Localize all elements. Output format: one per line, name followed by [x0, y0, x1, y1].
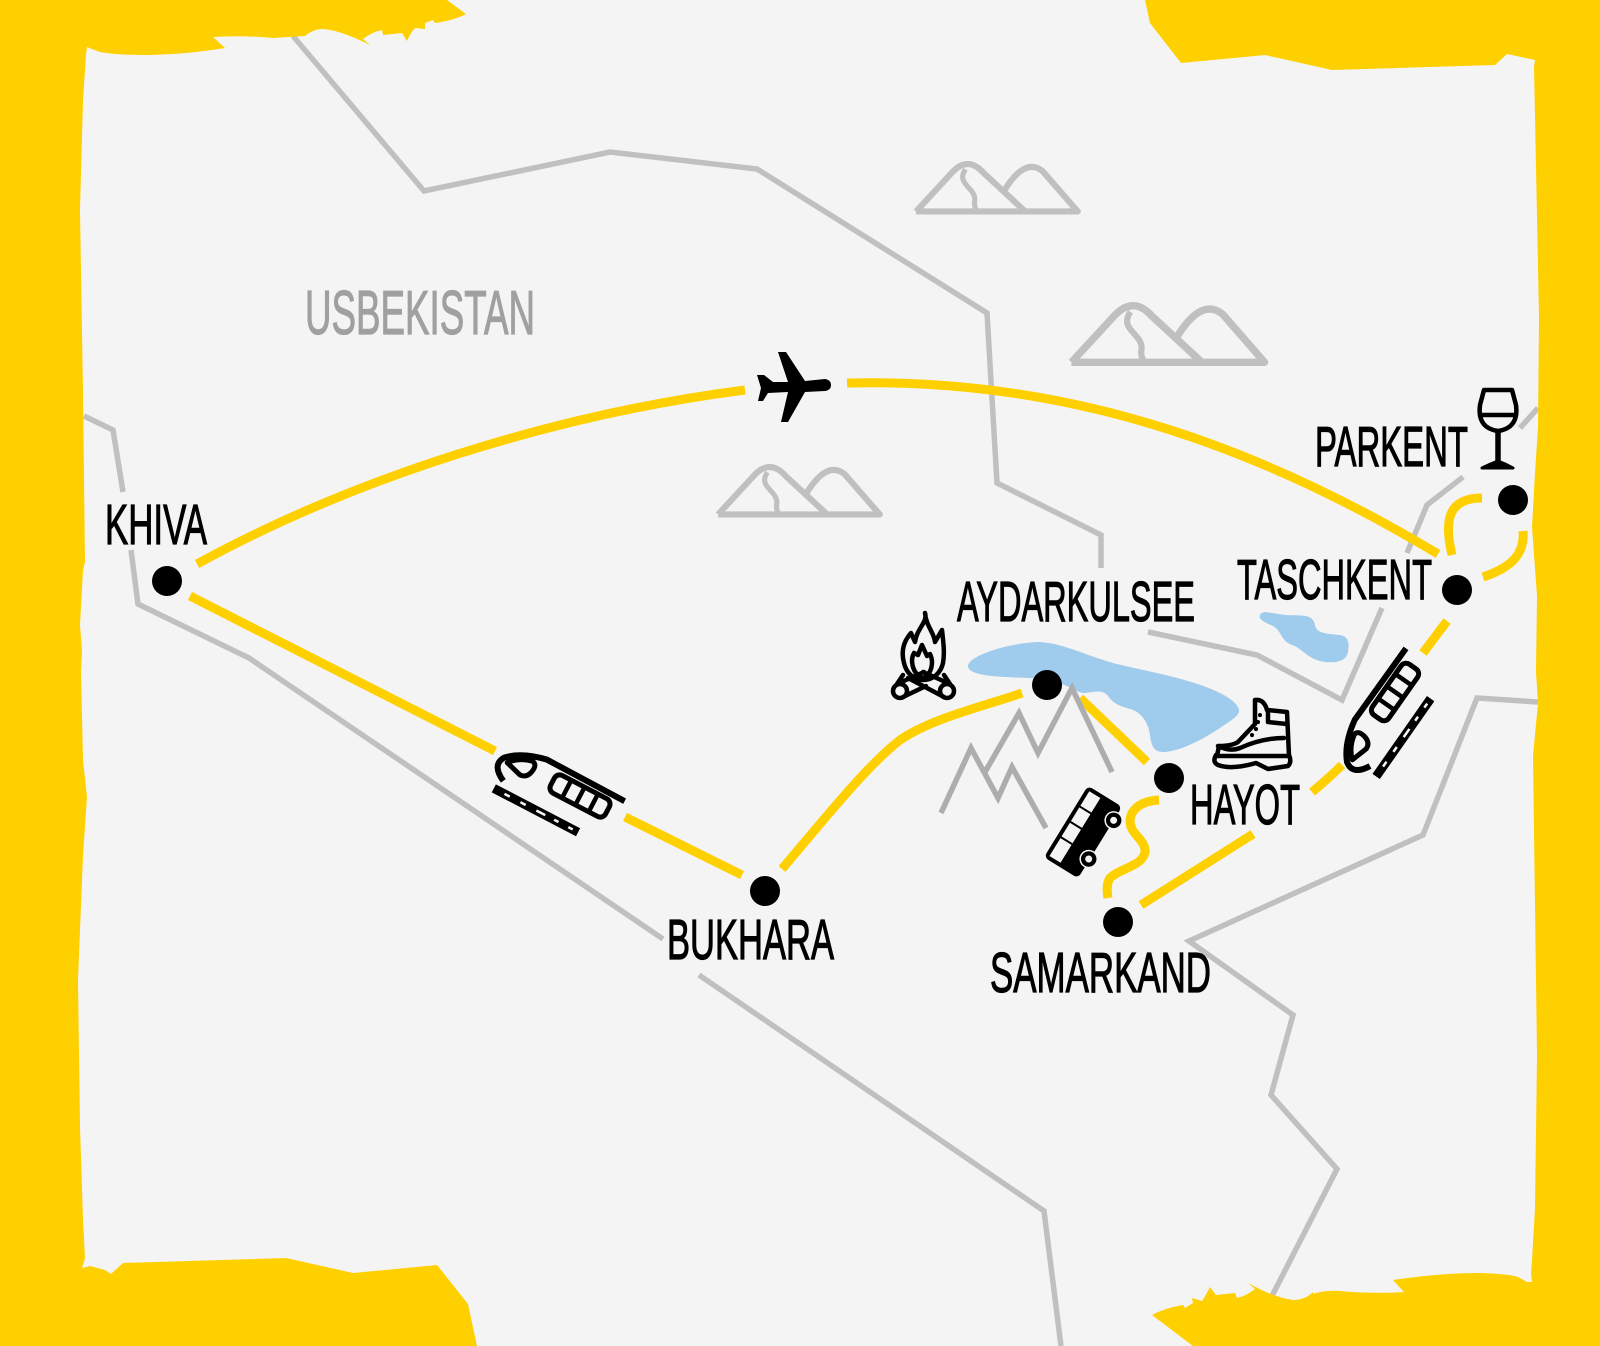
icon: wine glass — [1480, 390, 1517, 468]
label: Samarkand: SAMARKAND — [990, 941, 1211, 1005]
label: Taschkent: TASCHKENT — [1237, 548, 1432, 612]
mountains: central — [718, 467, 880, 514]
icon: train west — [487, 741, 625, 845]
mountains: northern — [916, 164, 1078, 211]
icon: train east — [1331, 648, 1446, 783]
label: Bukhara: BUKHARA — [667, 908, 834, 972]
icon: hiking boot — [1214, 700, 1290, 769]
icon: bus — [1044, 786, 1129, 883]
label: Hayot: HAYOT — [1190, 773, 1300, 837]
icon: campfire — [893, 613, 954, 698]
label: Khiva: KHIVA — [105, 493, 207, 557]
label: Parkent: PARKENT — [1315, 415, 1468, 479]
icon: plane — [757, 352, 831, 422]
mountains: eastern — [1071, 306, 1265, 362]
label: Aydarkulsee: AYDARKULSEE — [957, 570, 1195, 634]
dark mountain range — [941, 688, 1112, 828]
lake: Aydarkul — [968, 642, 1239, 752]
country label: USBEKISTAN — [305, 279, 535, 348]
city dots — [152, 485, 1528, 937]
yellow route — [190, 383, 1523, 905]
lake: near Taschkent — [1260, 612, 1349, 662]
